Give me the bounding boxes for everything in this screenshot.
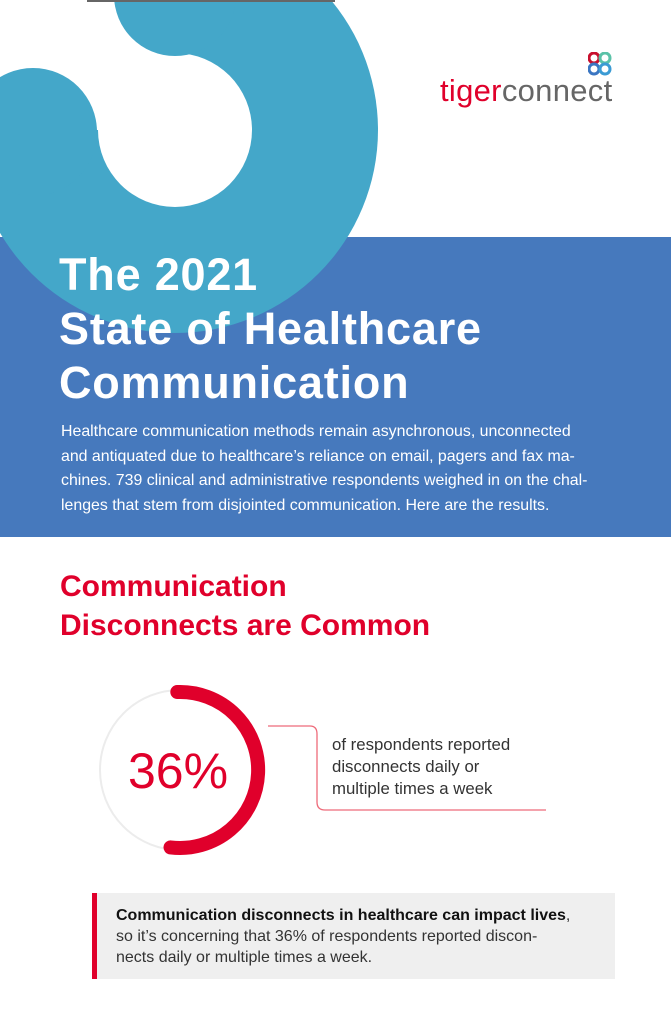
intro paragraph: Healthcare communication methods remain asynchronous, unconnected bbox=[61, 423, 571, 440]
callout: so it’s concerning that 36% of respondents reported discon- bbox=[116, 928, 537, 945]
connector line bbox=[268, 725, 546, 811]
logo: tigerconnect: tigerconnect bbox=[440, 73, 612, 108]
title: Communication bbox=[59, 357, 409, 408]
section heading bbox=[60, 570, 430, 642]
logo: tigerconnect bbox=[440, 52, 612, 108]
callout: Communication disconnects in healthcare can impact lives, bbox=[116, 907, 570, 924]
section heading: Disconnects are Common bbox=[60, 609, 430, 642]
title: State of Healthcare bbox=[59, 303, 482, 354]
section heading: Communication bbox=[60, 570, 287, 603]
stat description: disconnects daily or bbox=[332, 757, 479, 776]
donut chart: 36%: 36% bbox=[128, 743, 228, 799]
callout: nects daily or multiple times a week. bbox=[116, 949, 372, 966]
intro paragraph: lenges that stem from disjointed communication. Here are the results. bbox=[61, 496, 549, 514]
stat description bbox=[332, 735, 510, 798]
intro paragraph: chines. 739 clinical and administrative respondents weighed in on the chal- bbox=[61, 472, 587, 489]
callout bbox=[92, 893, 615, 979]
title bbox=[59, 249, 482, 408]
blue header band bbox=[0, 237, 671, 537]
stat description: multiple times a week bbox=[332, 779, 492, 798]
intro paragraph: and antiquated due to healthcare’s reliance on email, pagers and fax ma- bbox=[61, 448, 575, 464]
stat description: of respondents reported bbox=[332, 735, 510, 754]
icon: logo mark bbox=[588, 52, 612, 76]
decorative teal shape bbox=[0, 0, 378, 333]
intro paragraph bbox=[61, 423, 587, 514]
title: The 2021 bbox=[59, 249, 258, 300]
donut chart: 36% bbox=[99, 685, 266, 855]
